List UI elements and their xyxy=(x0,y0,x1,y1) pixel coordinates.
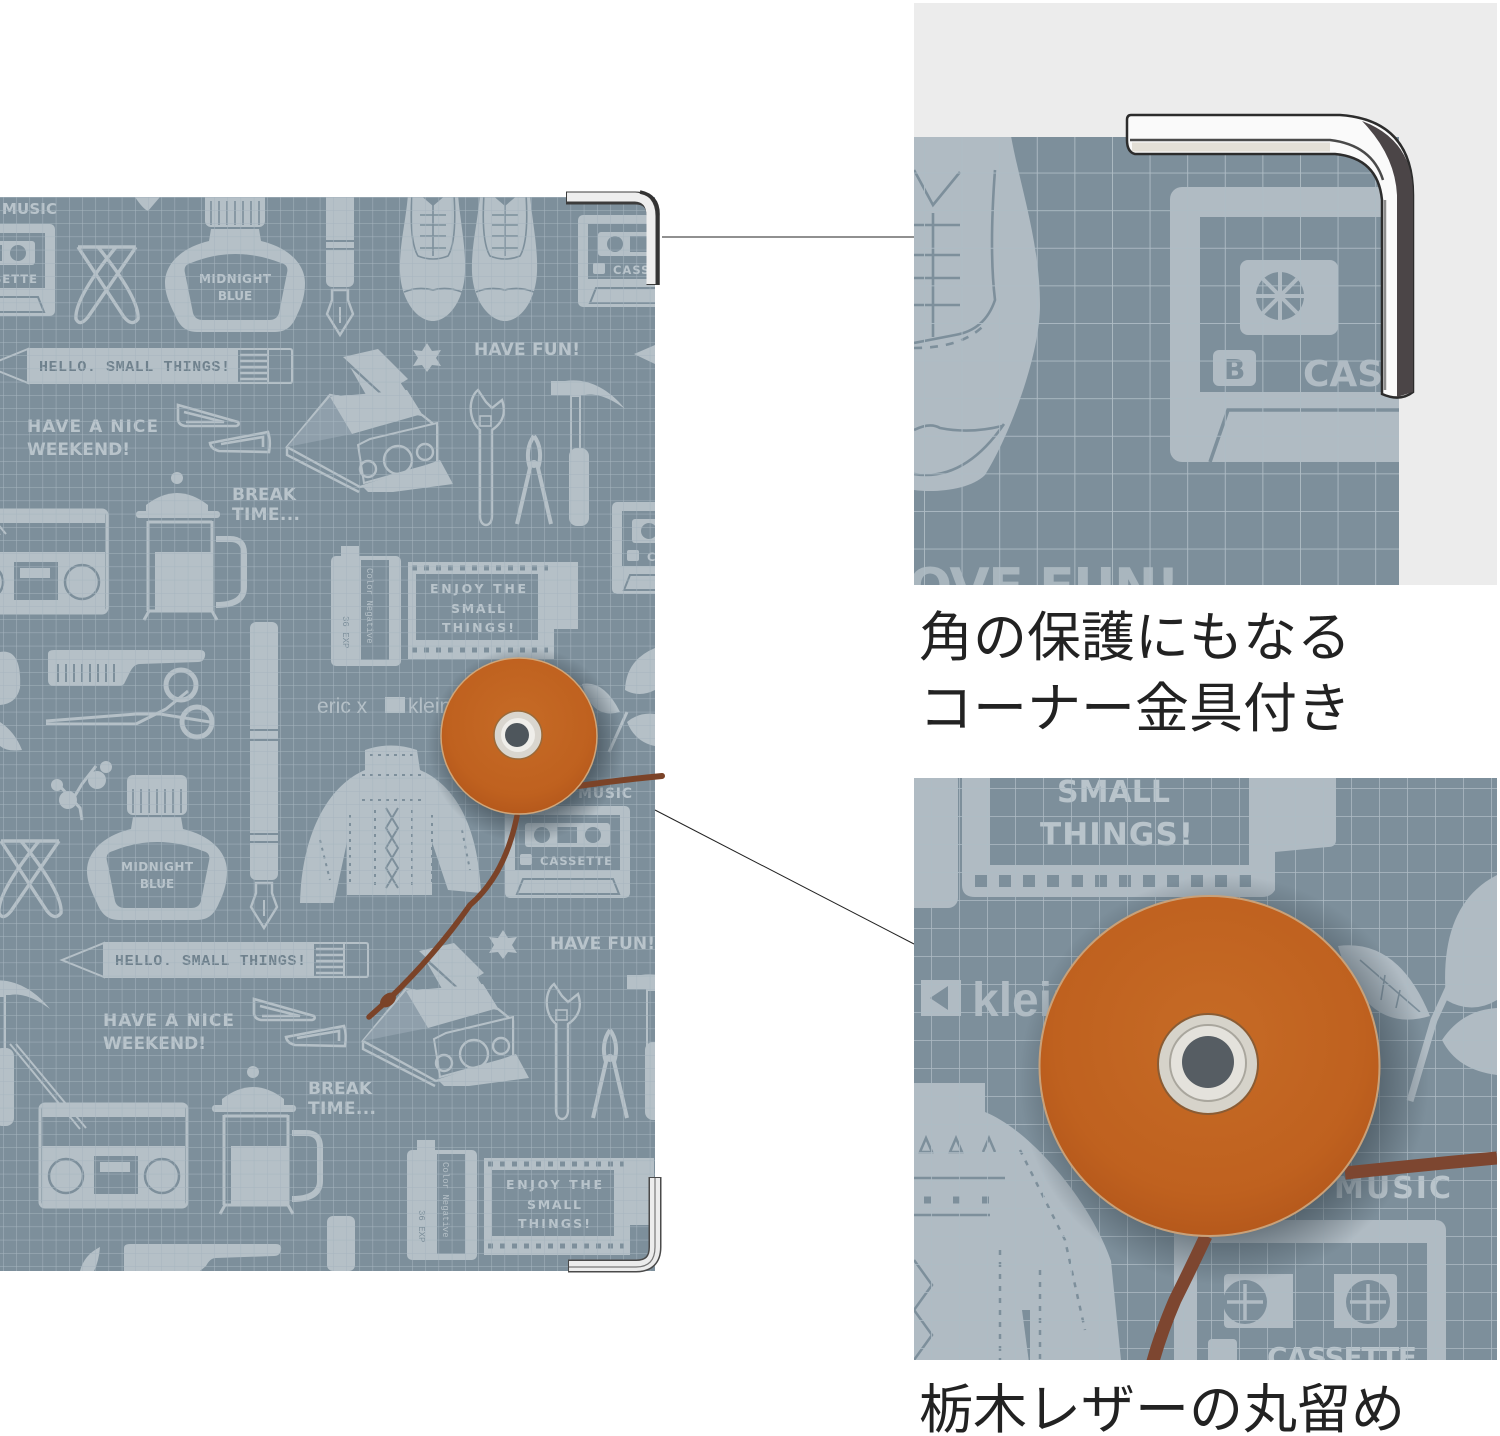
caption: corner fitting xyxy=(919,608,1351,739)
enlarged film strip: THINGS! xyxy=(1040,817,1193,853)
leader line: leather button xyxy=(655,810,914,944)
leather shadow xyxy=(1019,875,1429,1285)
enlarged leaf sprig xyxy=(1338,875,1497,1101)
pattern motifs: lower repeat: HAVE A NICE xyxy=(103,1011,234,1031)
enlarged film canister edge xyxy=(914,778,958,908)
enlarged motifs xyxy=(914,137,1399,585)
corner bracket: folder top right xyxy=(566,192,658,285)
enlarged cassette xyxy=(1174,1176,1450,1360)
leather button on folder xyxy=(441,658,597,814)
grid xyxy=(914,137,1399,585)
pattern motifs: lower repeat: WEEKEND! xyxy=(103,1034,206,1054)
pattern motifs: upper repeat: BREAK xyxy=(232,485,297,505)
leader line: corner xyxy=(662,236,914,238)
enlarged film strip xyxy=(962,770,1336,897)
panel: leather button detail photo xyxy=(905,770,1497,1380)
pattern motifs: upper repeat: HAVE FUN! xyxy=(474,340,580,360)
enlarged film strip: SMALL xyxy=(1057,775,1170,810)
pattern motifs: upper repeat: HAVE A NICE xyxy=(27,417,158,437)
pattern motifs: lower repeat xyxy=(0,775,701,1271)
pattern motifs: lower repeat: MUSIC xyxy=(578,786,632,802)
sweater motif xyxy=(300,746,481,903)
enlarged sweater xyxy=(905,1083,1122,1370)
enlarged cassette: MUSIC xyxy=(1334,1171,1451,1206)
grid xyxy=(914,778,1497,1360)
enlarged cassette xyxy=(1170,187,1410,462)
metal corner bracket xyxy=(1127,115,1413,398)
logo text: klein xyxy=(408,695,451,718)
caption: corner fitting: 角の保護にもなる xyxy=(919,608,1351,668)
enlarged cassette: CAS xyxy=(1303,354,1383,395)
partial logo xyxy=(921,980,1056,1016)
partial text: OVE FUN! xyxy=(908,558,1180,618)
pattern motifs: lower repeat: HAVE FUN! xyxy=(550,934,655,954)
partial logo: klein xyxy=(972,974,1081,1027)
pattern motifs: lower repeat: TIME... xyxy=(308,1099,376,1119)
comb xyxy=(48,650,205,686)
panel: corner detail photo xyxy=(908,3,1497,618)
enlarged cassette: B xyxy=(1224,353,1245,386)
logo text xyxy=(318,697,448,713)
logo text: eric x xyxy=(317,695,368,718)
pattern motifs: upper repeat: MUSIC xyxy=(2,200,57,218)
leather disc xyxy=(1040,896,1380,1236)
leather disc shadow xyxy=(428,647,624,843)
enlarged motifs xyxy=(905,770,1497,1380)
enlarged shoe xyxy=(914,130,1040,491)
pushpins xyxy=(51,761,112,820)
enlarged cassette: CASSETTE xyxy=(1267,1341,1417,1374)
pattern motifs: upper repeat: TIME... xyxy=(232,505,300,525)
brown cord xyxy=(369,776,662,1017)
cords xyxy=(1152,1158,1497,1365)
scissors xyxy=(46,670,212,737)
pattern motifs: lower repeat: BREAK xyxy=(308,1079,373,1099)
corner bracket: folder bottom right xyxy=(568,1177,655,1267)
pattern motifs: upper repeat: WEEKEND! xyxy=(27,440,130,460)
leaf sprig xyxy=(582,648,655,752)
pattern motifs: upper repeat xyxy=(0,29,737,928)
grommet xyxy=(1158,1014,1258,1114)
panel: folder cover xyxy=(0,197,655,1271)
caption: corner fitting: コーナー金具付き xyxy=(919,679,1351,739)
